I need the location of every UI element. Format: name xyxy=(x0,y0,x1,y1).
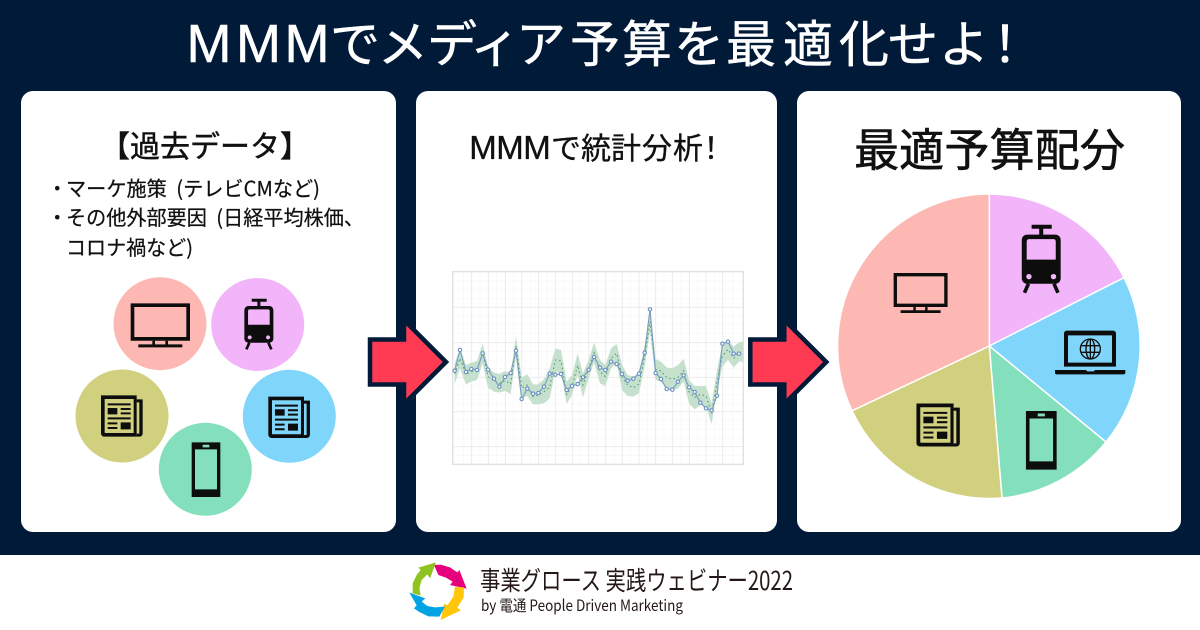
text block: data sources: マーケ施策 (テレビCMなど) xyxy=(66,172,320,202)
logo mark: cycle arrows xyxy=(409,562,467,620)
chart: time series with credible band xyxy=(453,272,743,464)
text block: data sources: その他外部要因 (日経平均株価、 xyxy=(66,201,364,231)
icon: train xyxy=(1022,225,1061,293)
text block: data sources: コロナ禍など) xyxy=(66,231,193,261)
pie chart xyxy=(838,194,1140,498)
heading: past data: 【過去データ】 xyxy=(100,122,310,166)
arrow: analysis to allocation xyxy=(750,320,826,404)
panel: optimal budget allocation xyxy=(797,91,1181,532)
media circle: web news xyxy=(243,370,336,463)
arrow: data to analysis xyxy=(370,320,446,404)
pie slice: train xyxy=(989,194,1124,346)
media circle: TV xyxy=(114,277,206,370)
logo text: by Dentsu: by 電通 People Driven Marketing xyxy=(481,594,683,616)
heading: MMM analysis: で統計分析！ xyxy=(551,124,726,168)
icon: newspaper xyxy=(916,403,960,447)
icon: smartphone xyxy=(1026,411,1057,470)
media circle: newspaper xyxy=(76,370,168,462)
pie slice: web xyxy=(989,278,1140,442)
icon: laptop xyxy=(1055,331,1125,374)
pie slice: smartphone xyxy=(989,346,1106,498)
media circle: train xyxy=(211,278,304,371)
text block: data sources: ・ xyxy=(47,201,68,231)
text block: data sources: ・ xyxy=(47,172,68,202)
data point markers xyxy=(453,308,741,412)
predicted series xyxy=(455,322,739,413)
pie slice: TV xyxy=(838,194,989,411)
heading: optimal budget: 最適予算配分 xyxy=(854,114,1125,179)
logo xyxy=(409,561,793,620)
pie slice: newspaper xyxy=(852,346,1002,498)
title: でメディア予算を最適化せよ！ xyxy=(330,5,1030,77)
credible interval band xyxy=(455,312,743,424)
heading: MMM analysis: MMM xyxy=(469,129,551,166)
logo text: webinar name: 事業グロース 実践ウェビナー2022 xyxy=(480,561,793,598)
icon: TV xyxy=(894,273,948,313)
media circle: smartphone xyxy=(159,423,252,516)
text block: data sources xyxy=(47,172,364,261)
panel: statistical analysis xyxy=(416,91,777,532)
actual series xyxy=(455,309,739,410)
title: MMM xyxy=(187,14,329,74)
panel: past data xyxy=(21,91,396,532)
